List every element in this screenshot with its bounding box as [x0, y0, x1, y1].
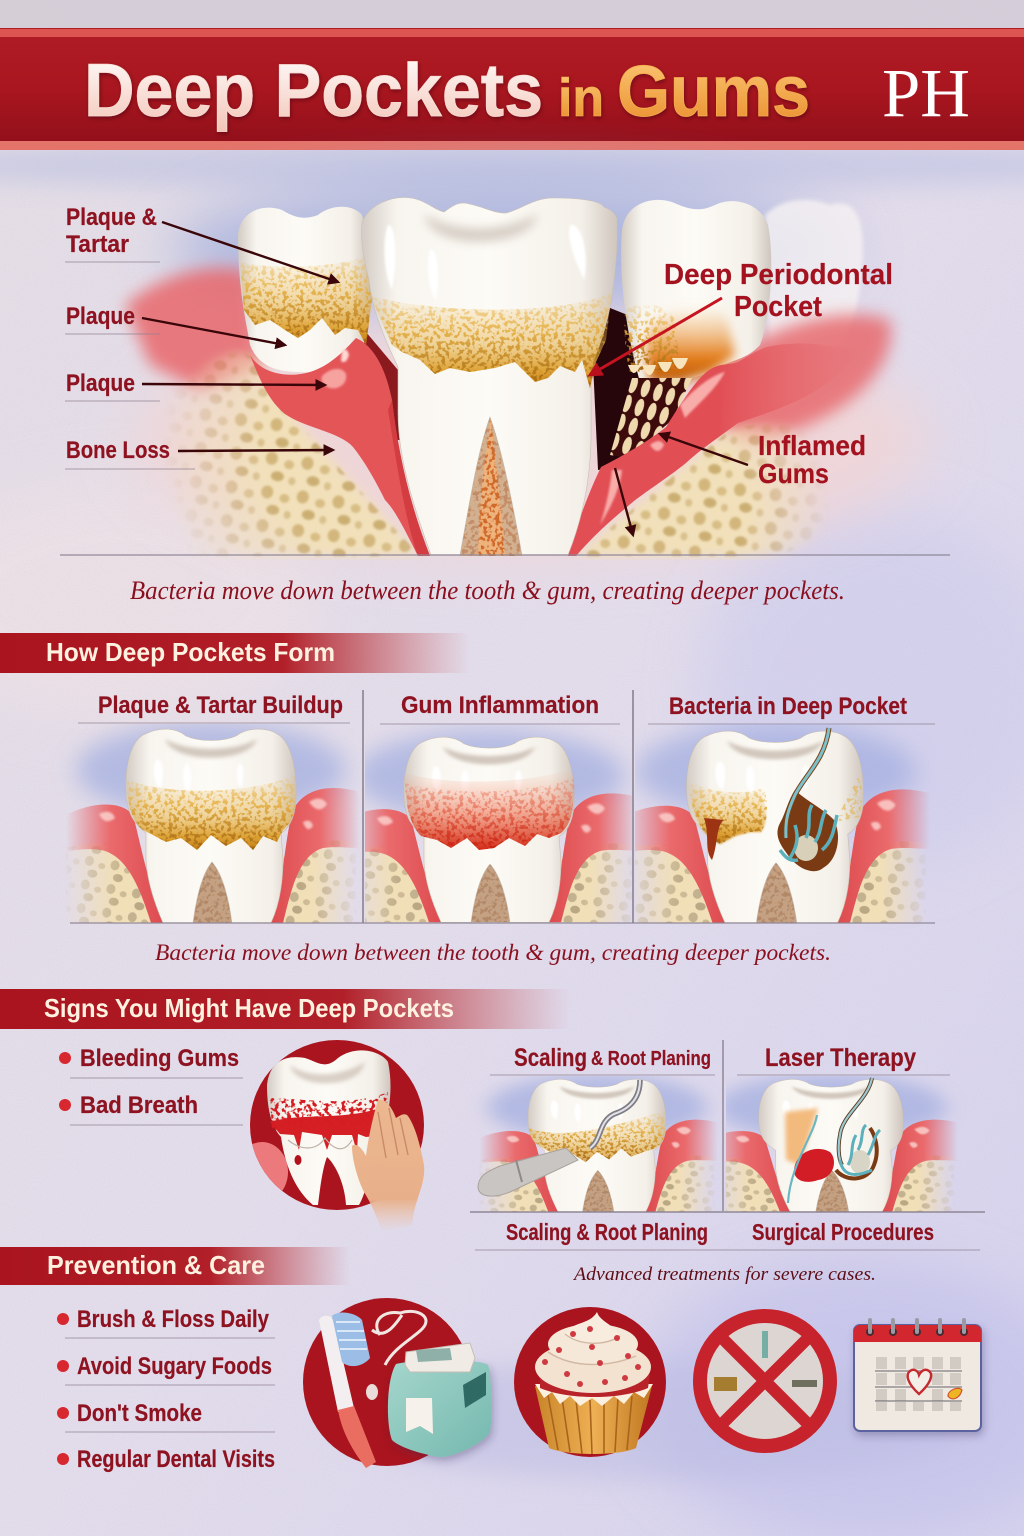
section band: signs: Signs You Might Have Deep Pockets [44, 993, 454, 1023]
icon: no smoking [699, 1315, 831, 1447]
panel: bacteria in deep pocket: Bacteria in Deep Pocket [669, 693, 907, 720]
labels left: Plaque [66, 370, 135, 397]
arrows [142, 222, 748, 535]
title [84, 48, 810, 132]
treatment labels [475, 1219, 980, 1250]
panel: plaque and tartar buildup [66, 692, 360, 923]
gum right [568, 344, 860, 556]
treatment caption: Advanced treatments for severe cases. [572, 1264, 876, 1285]
plaque on central molar [370, 292, 612, 388]
panel: gum inflammation [365, 695, 632, 922]
dark pockets [360, 325, 400, 440]
labels left: Plaque & [66, 204, 157, 231]
treatment labels: Surgical Procedures [752, 1219, 934, 1245]
caption: how pockets form: Bacteria move down between the tooth & gum, creating deeper pockets. [155, 940, 831, 966]
bone left [162, 352, 420, 556]
logo: PH: PH [882, 55, 970, 131]
floss strand [372, 1311, 426, 1365]
label: inflamed gums [758, 430, 866, 489]
label: deep periodontal pocket: Pocket [734, 291, 822, 323]
panel: bacteria in deep pocket [624, 693, 935, 923]
title: Deep Pockets [84, 48, 543, 132]
icon: cupcake [514, 1307, 666, 1457]
arrow: deep pocket [590, 298, 722, 375]
bone between roots [460, 417, 522, 556]
list: signs: Bleeding Gums [80, 1045, 239, 1072]
label: inflamed gums: Gums [758, 458, 829, 489]
panel: gum inflammation: Gum Inflammation [401, 692, 599, 719]
icon: bleeding gums with hand [236, 1040, 424, 1232]
panel: scaling and root planing [478, 1044, 718, 1212]
icon: scaling tool [478, 1080, 640, 1196]
panel: laser therapy: Laser Therapy [765, 1044, 916, 1072]
icon: toothbrush and floss [303, 1298, 491, 1468]
list: prevention: Don't Smoke [77, 1400, 202, 1427]
bacteria mesh in pocket [610, 378, 692, 458]
panel: scaling and root planing: Scaling [514, 1044, 587, 1072]
label: deep periodontal pocket: Deep Periodontal [664, 259, 893, 291]
soft gum mass [125, 268, 262, 390]
header banner [0, 28, 1024, 150]
treatment labels: Scaling & Root Planing [506, 1219, 708, 1245]
icon: bacteria in pocket [777, 728, 838, 871]
right tooth [621, 200, 771, 382]
panel: laser therapy [726, 1048, 956, 1212]
list: prevention [57, 1306, 275, 1473]
list: signs [59, 1045, 243, 1125]
list: prevention: Brush & Floss Daily [77, 1306, 270, 1333]
labels left: Bone Loss [66, 437, 170, 464]
back teeth [765, 200, 863, 348]
title: in [558, 68, 604, 128]
labels left: Plaque [66, 303, 135, 330]
hero caption: Bacteria move down between the tooth & gum, creating deeper pockets. [130, 576, 845, 605]
section band: signs [0, 989, 570, 1029]
hero illustration: tooth cross-section [65, 180, 930, 560]
treatment divider [470, 1040, 985, 1212]
icon: calendar [854, 1320, 981, 1431]
central molar [361, 197, 617, 555]
label: deep periodontal pocket [664, 259, 893, 323]
floss box [388, 1360, 491, 1457]
labels left: Tartar [66, 231, 129, 258]
toothbrush [319, 1313, 376, 1468]
hand [352, 1100, 424, 1232]
gum left [250, 338, 430, 556]
section band: prevention [0, 1247, 350, 1285]
section band: prevention: Prevention & Care [47, 1250, 265, 1280]
list: prevention: Regular Dental Visits [77, 1446, 275, 1473]
bone right [575, 424, 851, 556]
panel: plaque and tartar buildup: Plaque & Tartar Buildup [98, 692, 343, 719]
list: prevention: Avoid Sugary Foods [77, 1353, 272, 1380]
panel: scaling and root planing: & Root Planing [591, 1048, 711, 1070]
section band: how deep pockets form: How Deep Pockets Form [46, 637, 335, 667]
label: inflamed gums: Inflamed [758, 430, 866, 461]
list: signs: Bad Breath [80, 1092, 198, 1119]
icon: surgical detail [785, 1078, 880, 1203]
title: Gums [617, 52, 810, 132]
section band: how deep pockets form [0, 633, 470, 673]
labels left [65, 204, 195, 469]
panel dividers [70, 690, 935, 923]
left tooth [238, 207, 369, 372]
